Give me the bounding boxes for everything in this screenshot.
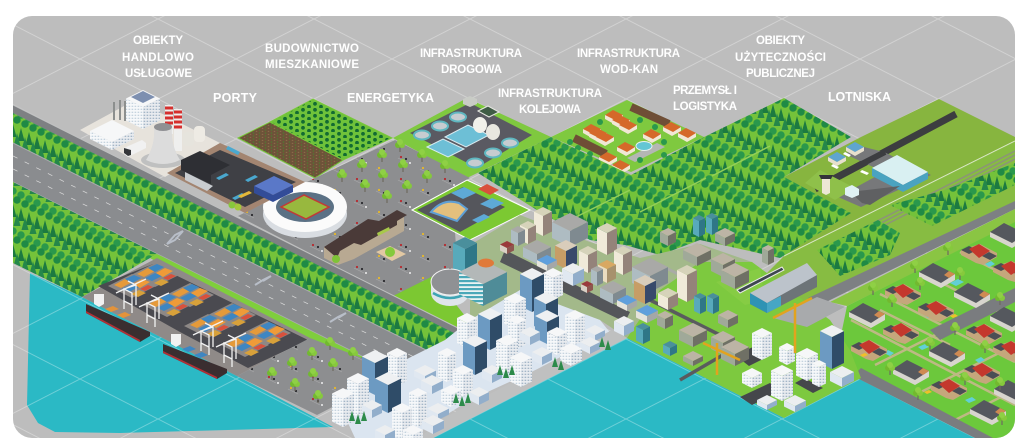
factory black hall	[181, 151, 230, 184]
lower forest	[13, 182, 157, 297]
label: obiekty handlowo-usługowe: USŁUGOWE	[125, 68, 192, 80]
small building	[463, 96, 477, 107]
label: infrastruktura kolejowa: KOLEJOWA	[519, 104, 581, 116]
city buildings	[332, 207, 854, 446]
label: infrastruktura drogowa: INFRASTRUKTURA	[420, 48, 522, 60]
basins	[427, 125, 489, 157]
water treatment plant	[393, 96, 551, 178]
container yard	[98, 264, 308, 368]
plot trees	[567, 117, 667, 163]
field: crops	[238, 122, 343, 178]
lower parking	[237, 337, 375, 415]
field: orchard	[270, 99, 392, 160]
residential waterfront road	[853, 368, 993, 438]
tower crane one	[773, 298, 812, 353]
brown department store	[324, 210, 407, 265]
plowed rows	[574, 107, 669, 154]
label: obiekty użyteczności publicznej: OBIEKTY	[756, 35, 805, 47]
wod-kan rural plot	[551, 100, 704, 174]
teal tower	[453, 237, 477, 276]
label: infrastruktura wod-kan: WOD-KAN	[600, 64, 658, 76]
stadium	[263, 182, 347, 238]
cooling tower	[146, 126, 180, 164]
residential sand paths	[851, 252, 1015, 420]
ship two	[163, 334, 227, 379]
chimneys	[113, 100, 126, 121]
green verge	[150, 254, 375, 363]
gray-roof houses	[919, 263, 955, 288]
truck	[124, 140, 146, 157]
water: port bay	[27, 273, 333, 433]
mall blocks	[451, 187, 504, 223]
gantry cranes	[116, 279, 146, 313]
highway	[13, 143, 430, 385]
mall plot	[412, 180, 530, 240]
label: budownictwo mieszkaniowe: BUDOWNICTWO	[265, 43, 359, 55]
factory plot	[167, 143, 305, 213]
island trees	[349, 337, 611, 424]
residential district	[840, 222, 1028, 438]
label: energetyka: ENERGETYKA	[347, 91, 434, 105]
main plant block	[126, 90, 160, 129]
label: infrastruktura drogowa: DROGOWA	[441, 64, 502, 76]
helipad	[478, 258, 494, 268]
clarifier tanks	[414, 112, 518, 168]
label: infrastruktura kolejowa: INFRASTRUKTURA	[498, 88, 602, 100]
runway	[815, 114, 956, 189]
label: infrastruktura wod-kan: INFRASTRUKTURA	[577, 48, 680, 60]
silos	[183, 132, 194, 146]
railway station	[737, 263, 817, 313]
round pavilion	[431, 269, 469, 306]
label: obiekty użyteczności publicznej: UŻYTECZNOŚCI	[735, 51, 826, 64]
stadium and parking block	[238, 139, 470, 296]
airport parcel	[784, 99, 1015, 256]
asphalt lots	[735, 347, 823, 405]
upper road edge	[13, 105, 460, 329]
garden trees	[868, 282, 876, 295]
station plaza	[773, 297, 845, 327]
blue warehouse	[254, 176, 293, 195]
terminal	[872, 155, 928, 185]
label: obiekty handlowo-usługowe: HANDLOWO	[122, 52, 194, 64]
lower parking trees	[267, 367, 277, 380]
district streets	[650, 300, 740, 380]
forest strip between roads	[13, 113, 470, 372]
island base	[335, 290, 612, 438]
trees	[228, 202, 236, 208]
water: city bay	[433, 338, 979, 438]
label: budownictwo mieszkaniowe: MIESZKANIOWE	[265, 59, 359, 71]
yard road	[627, 143, 665, 162]
ship one	[86, 294, 150, 342]
road east	[808, 201, 1015, 306]
forest paths	[570, 146, 770, 220]
upper road	[13, 105, 460, 337]
city streets	[500, 250, 630, 322]
label: obiekty użyteczności publicznej: PUBLICZNEJ	[746, 68, 815, 80]
railway and forest strip	[760, 141, 1015, 310]
planes	[831, 152, 869, 175]
tower crane two	[703, 343, 740, 375]
pools	[884, 261, 995, 403]
yellow cars	[860, 314, 958, 394]
rural houses	[605, 110, 623, 124]
label: przemysł i logistyka: PRZEMYSŁ I	[673, 85, 737, 97]
green strip by road east	[830, 209, 1015, 306]
plaza	[376, 246, 406, 261]
gantry signs	[167, 231, 346, 322]
label: obiekty handlowo-usługowe: OBIEKTY	[133, 35, 183, 47]
parking cars	[238, 140, 470, 296]
pond	[636, 142, 652, 150]
main forest	[478, 98, 851, 258]
lane dashes	[13, 156, 420, 370]
apron	[838, 146, 931, 207]
factory white wing	[185, 172, 213, 191]
power plant	[80, 90, 220, 177]
control tower	[822, 178, 830, 195]
south district ground	[627, 262, 861, 418]
lawn	[806, 170, 850, 200]
label: porty: PORTY	[213, 91, 258, 105]
low plant hall	[90, 120, 134, 150]
city centre ground	[470, 215, 752, 338]
island quay	[420, 330, 627, 438]
red-roof houses	[961, 244, 997, 265]
forest band	[890, 163, 1015, 226]
solar roof	[131, 91, 155, 103]
label: przemysł i logistyka: LOGISTYKA	[673, 101, 737, 113]
port	[82, 258, 310, 376]
treatment base	[410, 103, 532, 168]
lawn	[716, 268, 765, 305]
trucks	[216, 146, 258, 200]
parking trees	[395, 139, 405, 152]
mall building	[431, 202, 467, 221]
pitch	[281, 195, 329, 219]
container stacks	[131, 263, 179, 287]
white tanks	[473, 117, 487, 133]
hangars	[846, 142, 864, 152]
striped stacks	[165, 105, 182, 151]
residential street	[930, 288, 1015, 340]
label: lotniska: LOTNISKA	[828, 90, 891, 104]
main office building	[459, 260, 507, 306]
green lawn by office	[393, 276, 470, 329]
